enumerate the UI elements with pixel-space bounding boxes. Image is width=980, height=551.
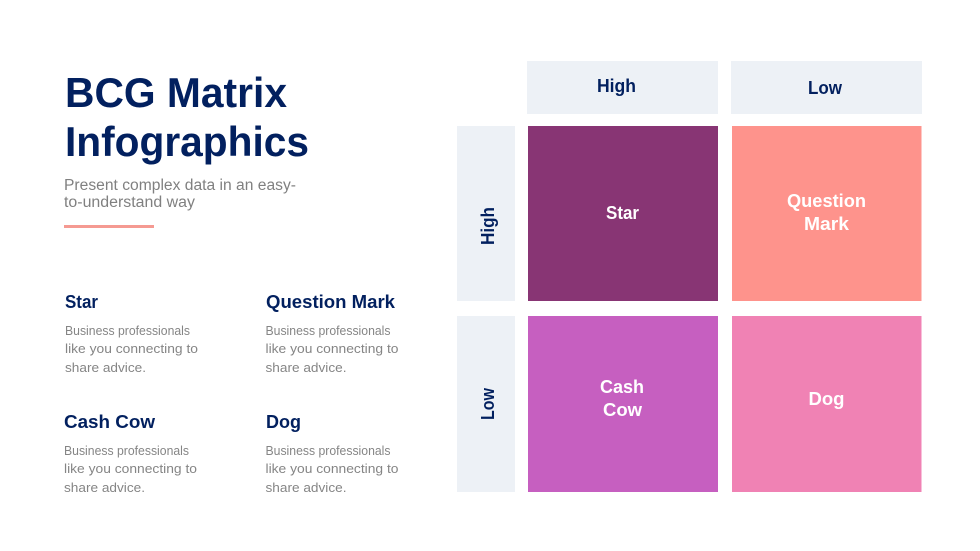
subtitle: to-understand way bbox=[64, 194, 195, 211]
text block: Dog bbox=[266, 411, 398, 495]
text block: Cash Cow bbox=[64, 411, 197, 495]
subtitle bbox=[64, 177, 296, 211]
column header: Low: Low bbox=[808, 78, 843, 98]
row header: High bbox=[457, 126, 515, 301]
text block: Question Mark: Question Mark bbox=[266, 291, 396, 312]
subtitle: Present complex data in an easy- bbox=[64, 177, 296, 194]
column header: High bbox=[527, 61, 718, 114]
column header: High: High bbox=[597, 76, 636, 96]
text block: Cash Cow: Cash Cow bbox=[64, 411, 156, 432]
row header: Low: Low bbox=[478, 387, 498, 420]
title: Infographics bbox=[65, 118, 309, 165]
text block: Star: Business professionals bbox=[65, 323, 190, 338]
matrix cell: Question Mark: Mark bbox=[804, 214, 850, 234]
text block: Dog: like you connecting to bbox=[266, 461, 398, 476]
text block: Cash Cow: like you connecting to bbox=[64, 461, 197, 476]
column header: Low bbox=[731, 61, 922, 114]
matrix cell: Cash Cow: Cow bbox=[603, 400, 643, 420]
text block: Dog: share advice. bbox=[266, 480, 346, 495]
matrix cell: Cash Cow bbox=[528, 316, 718, 492]
title bbox=[65, 69, 309, 165]
text block: Cash Cow: share advice. bbox=[64, 480, 145, 495]
matrix cell: Dog: Dog bbox=[808, 389, 844, 409]
text block: Star: share advice. bbox=[65, 360, 146, 375]
text block: Dog: Business professionals bbox=[266, 443, 391, 458]
matrix cell: Star: Star bbox=[606, 203, 639, 223]
matrix cell: Dog bbox=[732, 316, 922, 492]
text block: Star bbox=[65, 291, 198, 375]
matrix cell: Star bbox=[528, 126, 718, 301]
matrix cell: Question Mark bbox=[732, 126, 922, 301]
row header: High: High bbox=[478, 207, 498, 245]
accent underline bbox=[64, 225, 154, 228]
text block: Star: Star bbox=[65, 291, 98, 312]
matrix cell: Cash Cow: Cash bbox=[600, 377, 644, 397]
text block: Cash Cow: Business professionals bbox=[64, 443, 189, 458]
text block: Dog: Dog bbox=[266, 411, 301, 432]
text block: Question Mark: Business professionals bbox=[266, 323, 391, 338]
text block: Star: like you connecting to bbox=[65, 341, 198, 356]
row header: Low bbox=[457, 316, 515, 492]
title: BCG Matrix bbox=[65, 69, 288, 116]
text block: Question Mark: share advice. bbox=[266, 360, 346, 375]
text block: Question Mark: like you connecting to bbox=[266, 341, 398, 356]
text block: Question Mark bbox=[266, 291, 398, 375]
matrix cell: Question Mark: Question bbox=[787, 191, 866, 211]
